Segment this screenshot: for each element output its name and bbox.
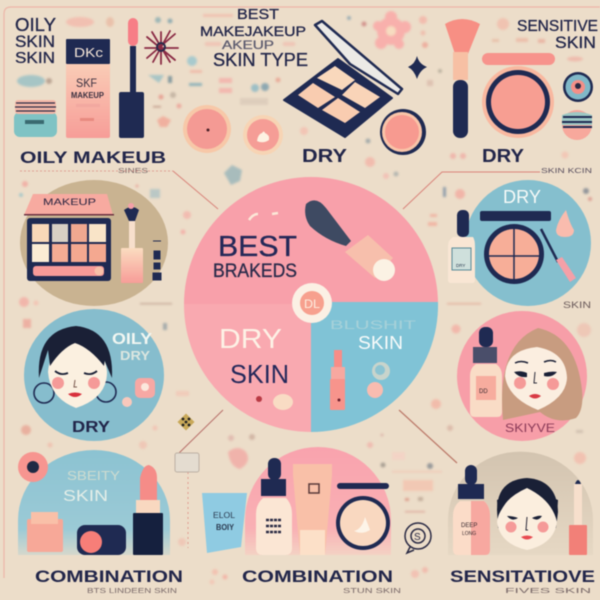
label: oily makeup: SINES bbox=[118, 168, 148, 175]
icon: dark sunburst flower bbox=[145, 31, 178, 64]
label: skiyve: SKIYVE bbox=[505, 421, 555, 435]
icon: makeup brush bbox=[445, 19, 480, 138]
icon: eight-pan palette bbox=[27, 218, 111, 281]
label: sensitive bbox=[450, 567, 595, 595]
pie text: best brands: BRAKEDS bbox=[213, 261, 297, 282]
icon: cream bottle bbox=[256, 458, 292, 555]
icon: speech badge bbox=[405, 523, 431, 553]
icon: sponge applicator bbox=[305, 200, 395, 281]
label: combination: COMBINATION bbox=[242, 567, 393, 586]
label: dry right: DRY bbox=[482, 146, 524, 166]
icon: quad compact bbox=[480, 211, 551, 284]
icon: cream compact small bbox=[243, 115, 283, 155]
icon: teal jar bbox=[14, 100, 57, 137]
icon: eyeshadow palette bbox=[284, 21, 402, 137]
icon: small eye compact bbox=[563, 72, 593, 102]
text: oily skin: SBEITY bbox=[67, 468, 120, 483]
panel background bbox=[457, 311, 587, 441]
icon: mini lipstick bbox=[330, 350, 345, 410]
panel background bbox=[24, 309, 164, 441]
center badge bbox=[292, 283, 332, 323]
icon: blue tube bbox=[202, 493, 247, 553]
panel background bbox=[448, 452, 593, 555]
label: combination: COMBINATION bbox=[35, 567, 183, 586]
icon: small brush bbox=[121, 203, 143, 283]
icon: serum bottle: DRY bbox=[456, 263, 465, 268]
panel background bbox=[245, 447, 391, 555]
icon: cream swatch bbox=[256, 394, 293, 410]
pie text: blue segment skin: BLUSHIT bbox=[330, 318, 417, 332]
icon: striped jar bbox=[562, 110, 592, 140]
icon: pink box bbox=[27, 512, 63, 552]
arrow: lower-left with tag bbox=[175, 410, 223, 548]
label: sensitive: SENSITATIOVE bbox=[450, 567, 595, 586]
heading: sensitive skin: SKIN bbox=[555, 33, 596, 52]
text: oily skin bbox=[63, 468, 120, 505]
face illustration bbox=[497, 478, 558, 550]
label: dry: DRY bbox=[72, 419, 110, 436]
pie text: blue segment skin: SKIN bbox=[358, 333, 403, 353]
label: sensitive: FIVES SKIN bbox=[505, 588, 591, 595]
title: BEST bbox=[237, 6, 279, 23]
icon: droplet bbox=[556, 210, 574, 237]
icon: foundation tube: MAKEUP bbox=[71, 91, 105, 100]
pie text: dry skin bbox=[219, 323, 289, 389]
awning label bbox=[24, 194, 114, 216]
icon: foundation tube: SKF bbox=[76, 76, 97, 90]
title bbox=[200, 6, 308, 70]
icon: dark compact bbox=[77, 525, 126, 555]
icon: serum bottle bbox=[448, 210, 475, 283]
panel: makeup palette bbox=[20, 180, 168, 306]
label: oily makeup: OILY MAKEUB bbox=[20, 148, 166, 167]
icons: heart compact bbox=[122, 378, 155, 407]
icon: compact with cream bbox=[336, 483, 390, 550]
panel: combination products bbox=[202, 447, 401, 595]
icon: dropper bottle bbox=[453, 465, 490, 555]
panel background bbox=[20, 180, 168, 306]
icon: blush compact bbox=[380, 109, 426, 155]
panel: skiyve face bbox=[457, 311, 587, 441]
icon: lip pencil bbox=[569, 480, 587, 555]
heading: sensitive skin: SENSITIVE bbox=[517, 18, 598, 35]
pie segment: lower-left pink bbox=[184, 304, 311, 432]
heading: sensitive skin bbox=[517, 18, 598, 52]
icon: speech badge: S bbox=[414, 532, 421, 543]
text: oily dry bbox=[112, 331, 152, 363]
small dark marks bbox=[153, 241, 161, 280]
face bbox=[505, 347, 567, 410]
label: combination bbox=[35, 567, 183, 595]
icon: pink flower bbox=[373, 11, 411, 49]
icon: peach tube bbox=[293, 464, 332, 555]
panel: sensitive face bbox=[448, 452, 595, 595]
panel background bbox=[465, 180, 591, 306]
arrow: top-right to center bbox=[403, 172, 540, 209]
mini patterned diamond icon bbox=[178, 414, 194, 430]
label: dry middle: DRY bbox=[302, 146, 347, 166]
caption: skin kcin: SKIN KCIN bbox=[541, 166, 592, 175]
icon: blue tube: BOIY bbox=[216, 523, 235, 532]
panel: oily dry face bbox=[24, 309, 164, 441]
label: combination bbox=[242, 567, 401, 595]
title: SKIN TYPE bbox=[213, 50, 308, 70]
arrow: lower-right bbox=[399, 410, 457, 463]
title: MAKEJAKEUP bbox=[200, 23, 306, 39]
text: oily dry: DRY bbox=[120, 348, 150, 363]
icon: blue tube: ELOL bbox=[213, 511, 236, 520]
icon: large round compact bbox=[482, 53, 555, 138]
icon: dropper bottle: DEEP bbox=[461, 523, 477, 529]
icon: lipstick bbox=[133, 465, 163, 555]
label: combination: BTS LINDEEN SKIN bbox=[87, 588, 177, 595]
heading: oily skin: SKIN bbox=[15, 50, 55, 67]
icon: eyeliner pen bbox=[541, 229, 576, 282]
panel background bbox=[18, 450, 170, 555]
title: AKEUP bbox=[222, 38, 274, 52]
face illustration bbox=[34, 326, 116, 408]
heading: oily skin: SKIN bbox=[15, 32, 55, 51]
heading: oily skin: OILY bbox=[15, 15, 56, 35]
pie text: blue segment skin bbox=[330, 318, 417, 353]
panel: dry products bbox=[448, 180, 591, 306]
pie text: dry skin: SKIN bbox=[230, 359, 289, 389]
icon: mini blush circles bbox=[367, 362, 390, 398]
label: skin right: SKIN bbox=[563, 300, 591, 310]
icon: foundation tube: DKc bbox=[74, 45, 104, 60]
icon: dropper bottle: LONG bbox=[462, 531, 476, 537]
icon: mascara bbox=[119, 18, 144, 138]
icon: foundation tube bbox=[66, 39, 110, 138]
text: oily dry: OILY bbox=[112, 331, 152, 348]
center badge: DL bbox=[304, 297, 320, 311]
icon: sparkle star bbox=[408, 56, 427, 79]
pie text: dry skin: DRY bbox=[219, 323, 282, 354]
pie text: best brands bbox=[213, 231, 297, 282]
pie segment: lower-right blue bbox=[311, 302, 438, 432]
arrow: top-left to center bbox=[20, 171, 218, 209]
heading: oily skin bbox=[15, 15, 56, 67]
small highlight marks bbox=[249, 213, 278, 220]
icon: powder compact large bbox=[183, 105, 231, 153]
text: oily skin: SKIN bbox=[63, 488, 108, 505]
text: dry: DRY bbox=[503, 187, 541, 207]
panel: combination lipstick bbox=[18, 450, 183, 595]
hair bbox=[502, 328, 582, 420]
icon: pink disc bbox=[18, 452, 48, 482]
pie text: best brands: BEST bbox=[218, 231, 297, 263]
label: oily makeup bbox=[20, 148, 166, 175]
label: combination: STUN SKIN bbox=[343, 588, 401, 595]
central pie chart bbox=[184, 177, 438, 432]
icon: dropper bottle: DD bbox=[479, 389, 488, 395]
awning label: MAKEUP bbox=[43, 197, 96, 207]
pie segment: upper pink bbox=[184, 177, 438, 304]
